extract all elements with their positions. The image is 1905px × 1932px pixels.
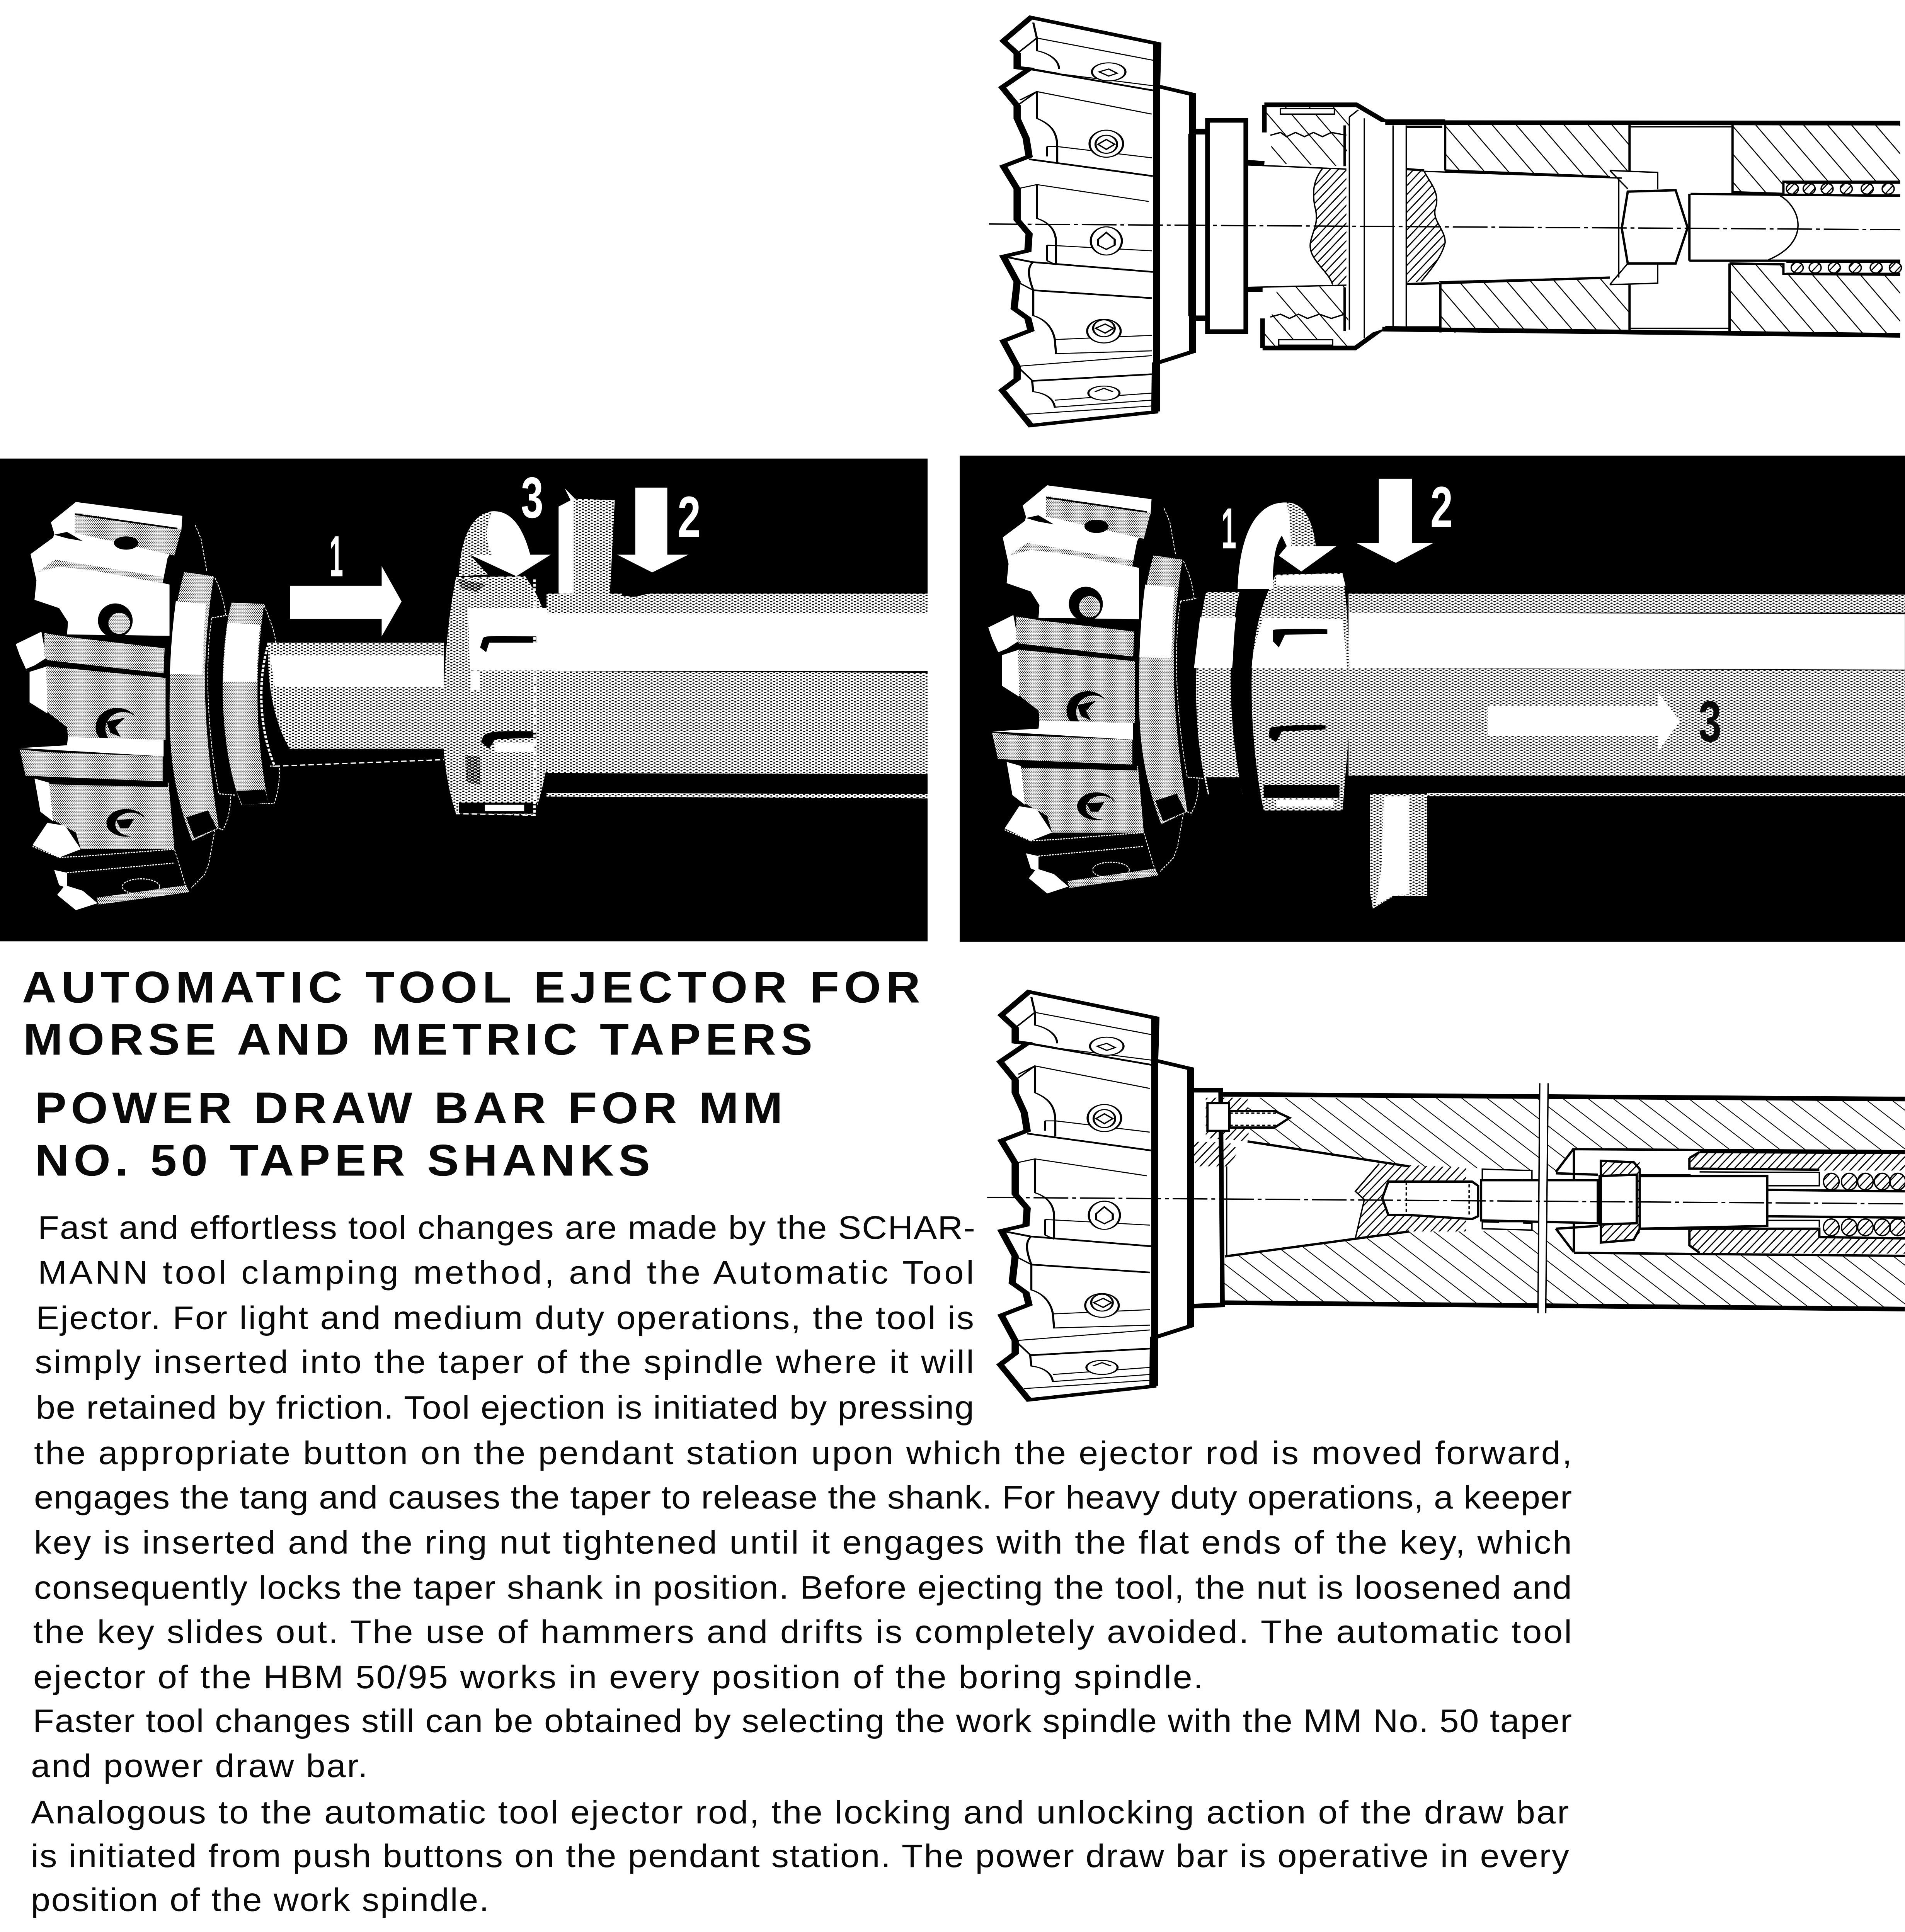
arrow 1: [290, 566, 402, 636]
cutter head section: [1002, 17, 1193, 425]
body text: Fast and effortless tool changes are made by the SCHAR-: [38, 1209, 975, 1246]
cutter head photograph: [988, 485, 1204, 893]
body text: is initiated from push buttons on the pendant station. The power draw bar is operative in every: [31, 1838, 1569, 1874]
step numbers: 1: [1221, 496, 1236, 561]
cutter head section: [1000, 992, 1191, 1400]
keeper key below spindle: [1370, 794, 1427, 908]
arrow 2: [1357, 479, 1433, 563]
body text: the key slides out. The use of hammers and drifts is completely avoided. The automatic tool: [33, 1614, 1572, 1650]
body text: MANN tool clamping method, and the Automatic Tool: [38, 1255, 974, 1291]
arrow 2: [617, 488, 688, 572]
body text: Analogous to the automatic tool ejector rod, the locking and unlocking action of the draw bar: [31, 1794, 1569, 1830]
keeper key: [558, 488, 615, 594]
panel: photo step 2 black background: [960, 456, 1905, 942]
heading: power draw bar: [35, 1083, 783, 1185]
curved arrow 1: [1238, 502, 1336, 589]
arrow 3: [1488, 692, 1680, 752]
technical drawing: cutter with MM No. 50 taper and power draw bar: [987, 992, 1905, 1400]
spindle: [546, 592, 928, 798]
technical drawing: cutter with morse taper and ejector, top right: [989, 17, 1902, 425]
collar: [1194, 592, 1255, 795]
body text: Faster tool changes still can be obtained by selecting the work spindle with the MM No. 50 taper: [33, 1703, 1572, 1739]
step numbers: [329, 465, 701, 588]
body text: key is inserted and the ring nut tightened until it engages with the flat ends of the key, which: [34, 1524, 1572, 1561]
coil spring: [1823, 1173, 1905, 1236]
step numbers: 2: [1430, 474, 1453, 539]
heading: power draw bar: NO. 50 TAPER SHANKS: [35, 1136, 650, 1185]
step numbers: [1221, 474, 1721, 754]
ring nut: [1251, 573, 1350, 811]
collar: [223, 602, 279, 805]
body text: and power draw bar.: [31, 1748, 368, 1784]
curved arrow 3: [459, 511, 551, 576]
spindle cross-section: [987, 1083, 1905, 1313]
body text: [31, 1209, 1572, 1918]
heading: automatic tool ejector: AUTOMATIC TOOL EJECTOR FOR: [22, 963, 920, 1012]
body text: ejector of the HBM 50/95 works in every position of the boring spindle.: [33, 1659, 1203, 1696]
body text: simply inserted into the taper of the spindle where it will: [35, 1344, 974, 1380]
spindle cross-section: [989, 105, 1902, 348]
heading: power draw bar: POWER DRAW BAR FOR MM: [35, 1083, 783, 1133]
heading: automatic tool ejector: MORSE AND METRIC TAPERS: [23, 1015, 812, 1065]
heading: automatic tool ejector: [22, 963, 920, 1065]
shank and collar: [261, 643, 459, 766]
body text: engages the tang and causes the taper to release the shank. For heavy duty operations, a keeper: [34, 1480, 1572, 1516]
body text: Ejector. For light and medium duty operations, the tool is: [36, 1300, 974, 1336]
ring nut: [443, 577, 556, 815]
step numbers: 3: [521, 465, 543, 530]
step numbers: 3: [1699, 689, 1721, 754]
body text: position of the work spindle.: [31, 1882, 489, 1918]
body text: be retained by friction. Tool ejection is initiated by pressing: [36, 1389, 974, 1426]
step numbers: 1: [329, 524, 343, 588]
cutter head photograph: [16, 502, 235, 910]
panel: photo step 1 black background: [0, 459, 928, 941]
spindle: [1348, 594, 1905, 796]
coil spring: [1786, 184, 1902, 273]
body text: consequently locks the taper shank in position. Before ejecting the tool, the nut is loosened and: [34, 1570, 1572, 1606]
step numbers: 2: [678, 485, 701, 549]
body text: the appropriate button on the pendant station upon which the ejector rod is moved forward,: [34, 1435, 1572, 1471]
